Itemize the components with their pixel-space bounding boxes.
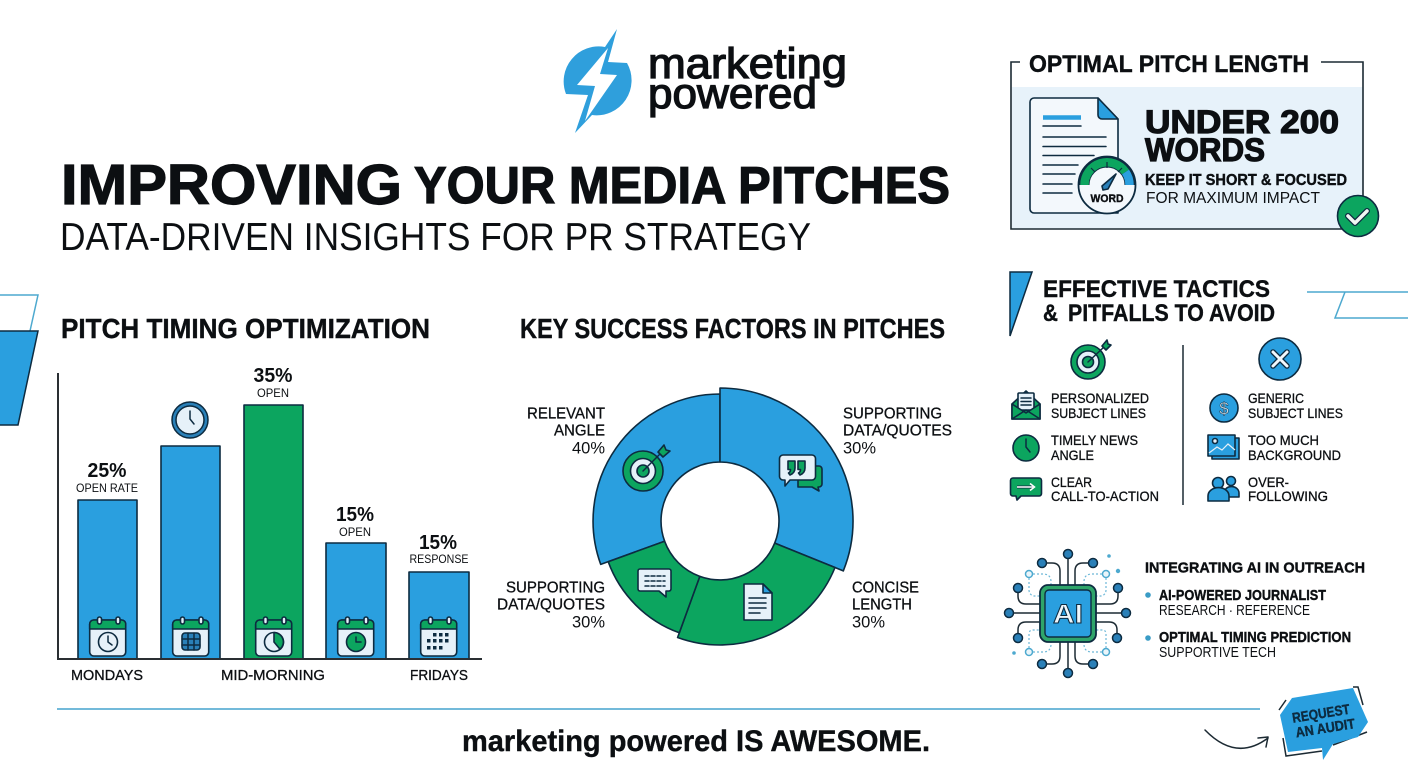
- bar chart: pitch timing: [58, 365, 482, 684]
- segment: concise length: [678, 543, 835, 645]
- label: supporting data/quotes 30% right: 30%: [843, 438, 876, 458]
- tactic: clear call-to-action: [1010, 474, 1159, 504]
- icon: target: [1071, 340, 1111, 379]
- bullet: optimal timing prediction: [1145, 630, 1351, 661]
- label: concise length 30%: LENGTH: [852, 596, 912, 614]
- segment: supporting data left: [608, 541, 700, 633]
- pitfall: generic subject lines: GENERIC: [1248, 390, 1304, 406]
- title: [61, 153, 950, 217]
- label: supporting data/quotes 30% left: SUPPORTING: [506, 580, 605, 596]
- donut chart: key success factors: [497, 388, 952, 645]
- icon: envelope: [1012, 391, 1040, 419]
- bubble text: [1291, 700, 1357, 740]
- pitfall: too much background: TOO MUCH: [1248, 432, 1319, 448]
- column: pitfalls to avoid: [1208, 338, 1343, 504]
- icon: AI chip: AI: [1053, 599, 1083, 629]
- subtitle: DATA-DRIVEN INSIGHTS FOR PR STRATEGY: [60, 216, 811, 259]
- icon: image stack: [1208, 435, 1239, 459]
- value label: 15% response: 15%: [419, 532, 457, 554]
- label: relevant angle 40%: ANGLE: [554, 422, 605, 440]
- icon: green check: [1338, 196, 1378, 236]
- bullet: AI-powered journalist research: RESEARCH · REFERENCE: [1159, 603, 1310, 619]
- icon: x circle: [1259, 338, 1301, 380]
- bullet: optimal timing prediction: OPTIMAL TIMING PREDICTION: [1159, 630, 1351, 646]
- text: under 200 words: FOR MAXIMUM IMPACT: [1146, 190, 1320, 207]
- panel heading: PITFALLS TO AVOID: [1068, 300, 1275, 327]
- value label: 15% open: OPEN: [339, 525, 371, 539]
- pitfall: too much background: BACKGROUND: [1248, 447, 1341, 463]
- pitfall: over-following: OVER-: [1248, 474, 1289, 490]
- icon: quote bubbles: [780, 455, 822, 491]
- column divider: [1182, 345, 1184, 505]
- pitfall: generic subject lines: SUBJECT LINES: [1248, 405, 1343, 421]
- value label: 35% open: [254, 365, 293, 400]
- value label: 25% open rate: [76, 460, 138, 495]
- icon: people: [1208, 476, 1239, 501]
- tactic: personalized subject lines: [1012, 390, 1149, 421]
- bar: fridays: [409, 532, 469, 659]
- icon: green clock: [1013, 435, 1039, 461]
- icon: document with gauge: [1030, 98, 1136, 214]
- panel heading: &: [1043, 300, 1058, 327]
- label: concise length 30%: CONCISE: [852, 580, 919, 596]
- segment: relevant angle: [593, 394, 720, 564]
- pitfall: generic subject lines: [1210, 390, 1343, 422]
- bullet: AI-powered journalist research: [1145, 588, 1326, 619]
- bar: second unlabeled day: [161, 402, 220, 659]
- icon: AI chip: [1004, 550, 1130, 678]
- decorative teal shape: [1307, 292, 1408, 318]
- gauge: WORD: [1090, 193, 1124, 205]
- panel: integrating AI in outreach: [1004, 550, 1365, 678]
- segment: supporting data right: [720, 388, 853, 571]
- bubble text: REQUEST: [1291, 701, 1351, 726]
- panel: effective tactics and pitfalls: [1010, 272, 1408, 505]
- bullet: optimal timing prediction: SUPPORTIVE TECH: [1159, 645, 1276, 661]
- heading: key success factors: KEY SUCCESS FACTORS IN PITCHES: [520, 313, 945, 344]
- bubble: [1280, 688, 1368, 760]
- decorative left tab: [0, 295, 38, 425]
- icon: calendar pie clock: [256, 617, 292, 656]
- tactic: timely news angle: ANGLE: [1051, 447, 1094, 463]
- value label: 15% open: [336, 504, 374, 539]
- bar: mondays: [76, 460, 138, 659]
- icon: calendar green clock: [338, 617, 374, 656]
- axis labels: [71, 668, 468, 684]
- label: relevant angle 40%: RELEVANT: [527, 406, 605, 422]
- label: relevant angle 40%: [527, 406, 605, 458]
- title: YOUR MEDIA PITCHES: [414, 157, 950, 215]
- value label: 35% open: OPEN: [257, 386, 289, 400]
- tactic: timely news angle: [1013, 432, 1138, 463]
- value label: 25% open rate: 25%: [88, 460, 127, 482]
- tactic: personalized subject lines: PERSONALIZED: [1051, 390, 1149, 406]
- bullet: AI-powered journalist research: AI-POWERED JOURNALIST: [1159, 588, 1326, 604]
- label: supporting data/quotes 30% right: DATA/QUOTES: [843, 422, 952, 440]
- value label: 25% open rate: OPEN RATE: [76, 481, 138, 495]
- label: relevant angle 40%: 40%: [572, 438, 605, 458]
- tactic: personalized subject lines: SUBJECT LINES: [1051, 405, 1146, 421]
- value label: 15% open: 15%: [336, 504, 374, 526]
- axis labels: FRIDAYS: [410, 668, 468, 684]
- logo wordmark: [648, 40, 847, 118]
- logo: marketing powered: [564, 29, 847, 133]
- call to action: request an audit: [1279, 687, 1368, 760]
- axis labels: MID-MORNING: [221, 668, 325, 684]
- pitfall: over-following: FOLLOWING: [1248, 488, 1328, 504]
- text: under 200 words: WORDS: [1145, 132, 1265, 168]
- footer tagline: marketing powered IS AWESOME.: [462, 725, 930, 758]
- bubble back outline: [1279, 687, 1367, 756]
- icon: document: [744, 584, 772, 620]
- icon: dollar circle: $: [1219, 399, 1229, 418]
- panel background: [1012, 87, 1363, 229]
- panel heading: OPTIMAL PITCH LENGTH: [1029, 51, 1309, 78]
- bar: thursday: [326, 504, 386, 659]
- text: under 200 words: UNDER 200: [1145, 104, 1339, 140]
- axis labels: MONDAYS: [71, 668, 143, 684]
- pitfall: too much background: [1208, 432, 1341, 463]
- value label: 35% open: 35%: [254, 365, 293, 387]
- icon: calendar clock: [90, 617, 126, 656]
- text: under 200 words: KEEP IT SHORT & FOCUSED: [1145, 172, 1347, 189]
- label: concise length 30%: [852, 580, 919, 632]
- panel heading: INTEGRATING AI IN OUTREACH: [1145, 560, 1365, 576]
- icon: target: [623, 445, 670, 491]
- footer rule: [57, 708, 1260, 710]
- label: supporting data/quotes 30% left: [497, 580, 605, 632]
- panel heading: [1043, 276, 1275, 327]
- pitfall: over-following: [1208, 474, 1328, 504]
- tactic: clear call-to-action: CALL-TO-ACTION: [1051, 488, 1159, 504]
- arrow to call to action: [1205, 730, 1268, 748]
- title: IMPROVING: [61, 153, 402, 217]
- text: under 200 words: [1145, 104, 1347, 207]
- label: concise length 30%: 30%: [852, 612, 885, 632]
- icon: speech arrow: [1010, 478, 1042, 500]
- value label: 15% response: [410, 532, 468, 566]
- panel frame: [1011, 62, 1363, 229]
- label: supporting data/quotes 30% left: DATA/QUOTES: [497, 596, 605, 614]
- tactic: clear call-to-action: CLEAR: [1051, 474, 1092, 490]
- panel: optimal pitch length: [1011, 51, 1378, 236]
- icon: lightning bolt logo: [564, 29, 632, 133]
- panel heading: EFFECTIVE TACTICS: [1043, 276, 1270, 303]
- heading: pitch timing optimization: PITCH TIMING OPTIMIZATION: [61, 313, 430, 344]
- label: supporting data/quotes 30% left: 30%: [572, 612, 605, 632]
- label: supporting data/quotes 30% right: [843, 406, 952, 458]
- column: effective tactics: [1010, 340, 1159, 504]
- tactic: timely news angle: TIMELY NEWS: [1051, 432, 1138, 448]
- bar: mid-morning: [244, 365, 303, 659]
- logo wordmark: marketing: [648, 40, 847, 88]
- icon: clock above bar: [172, 402, 208, 438]
- bubble text: AN AUDIT: [1294, 715, 1357, 740]
- icon: calendar dots: [421, 617, 457, 656]
- icon: chat bubble: [638, 569, 671, 597]
- label: supporting data/quotes 30% right: SUPPORTING: [843, 406, 942, 422]
- icon: blue triangle accent: [1010, 272, 1032, 336]
- icon: calendar grid: [173, 617, 209, 656]
- chart axes: [58, 373, 482, 659]
- logo wordmark: powered: [648, 70, 817, 118]
- value label: 15% response: RESPONSE: [410, 552, 468, 566]
